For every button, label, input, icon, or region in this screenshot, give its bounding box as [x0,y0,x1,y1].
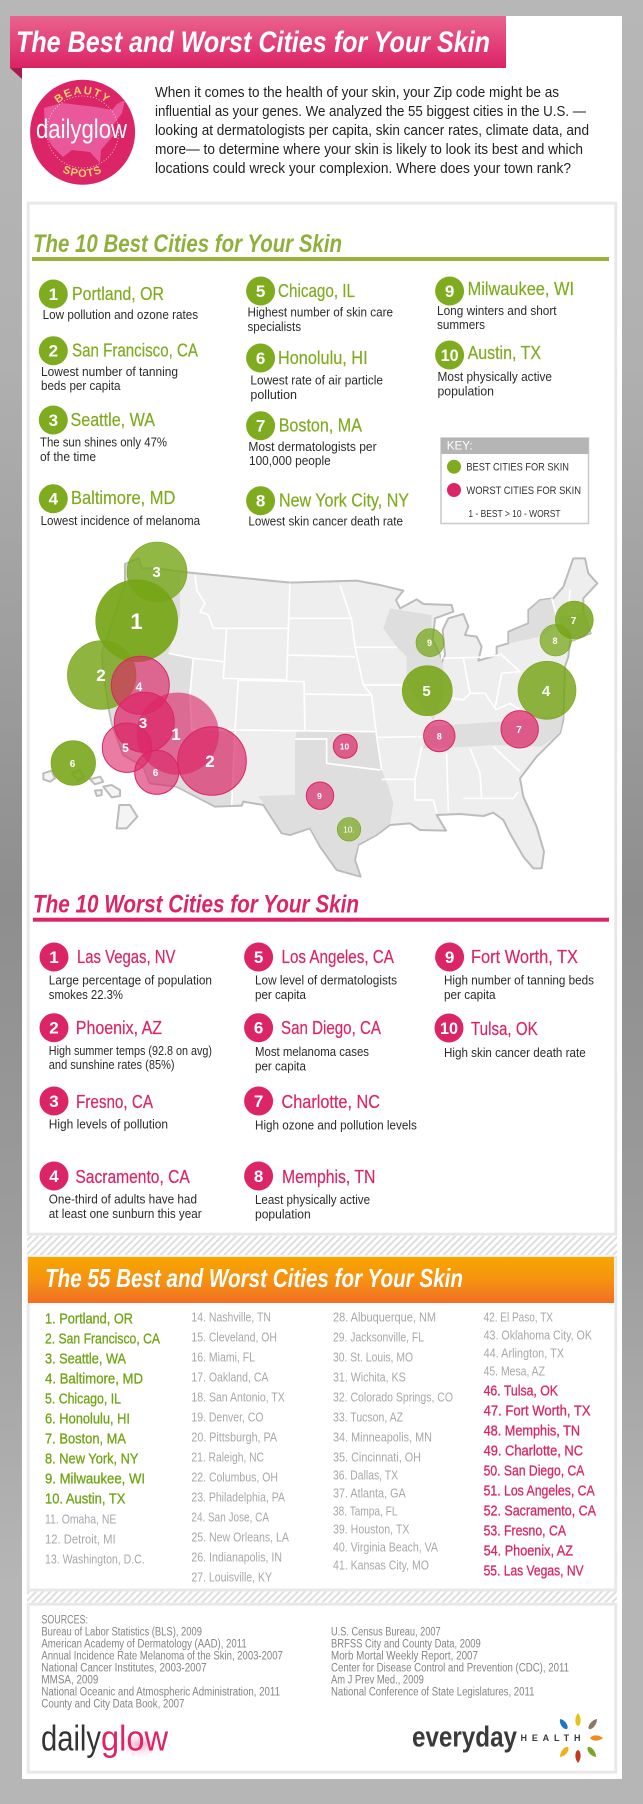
list column 4: 52. Sacramento, CA [484,1503,596,1519]
sources left column: SOURCES: [41,1614,88,1626]
title: The Best and Worst Cities for Your Skin [16,26,490,59]
map rank numbers: 3 [139,715,147,732]
map rank numbers: 6 [153,768,159,779]
logo: everyday health: HEALTH [520,1733,580,1743]
sources right column: BRFSS City and County Data, 2009 [331,1638,481,1650]
panel: best and worst cities [28,203,616,1234]
worst city 9 [435,942,594,1002]
worst city 5: per capita [255,988,306,1002]
best city 10: 10 [441,346,459,365]
best city 7: Boston, MA [279,416,362,436]
best city 9 [435,276,574,332]
list column 2: 27. Louisville, KY [191,1571,273,1585]
worst city 10: High skin cancer death rate [444,1046,586,1060]
map rank numbers: 7 [516,725,522,736]
worst city 1: smokes 22.3% [49,988,123,1002]
logo: everyday health [412,1713,603,1763]
worst city 6: San Diego, CA [281,1018,381,1038]
heading: 10 best cities [32,230,609,261]
sources left column: National Cancer Institutes, 2003-2007 [41,1662,207,1674]
icon: everyday health burst [560,1713,603,1763]
heading: 10 best cities: The 10 Best Cities for Your Skin [33,230,342,258]
best city 10: Most physically active [438,370,552,384]
worst city 1: Las Vegas, NV [77,947,175,967]
worst city 4: One-third of adults have had [49,1193,197,1207]
best city 4: 4 [49,490,59,509]
best city 3: of the time [40,450,96,464]
best city 5: 5 [256,282,265,301]
worst city 6: Most melanoma cases [255,1045,369,1059]
list column 2: 24. San Jose, CA [191,1511,270,1525]
list column 1: 12. Detroit, MI [45,1532,116,1546]
list column 1: 3. Seattle, WA [45,1351,126,1367]
worst city 8 [244,1162,375,1222]
list column 4: 48. Memphis, TN [484,1423,580,1439]
worst city 7: Charlotte, NC [282,1092,380,1112]
best city 9: 9 [445,282,454,301]
list column 4: 55. Las Vegas, NV [484,1563,584,1579]
worst city 9: 9 [445,948,454,967]
list column 4: 42. El Paso, TX [484,1311,554,1325]
icon: beauty spots badge [30,80,136,185]
list column 4: 53. Fresno, CA [484,1523,566,1539]
map rank numbers: 2 [205,752,215,771]
best city 2: beds per capita [41,379,121,393]
worst city 4 [40,1162,202,1221]
best city 6: Lowest rate of air particle [250,374,383,388]
best city 9: Long winters and short [437,304,557,318]
heading: 10 worst cities [33,891,609,922]
list column 1 [45,1311,160,1566]
map rank numbers: 9 [317,791,322,801]
worst city 9: per capita [444,988,496,1002]
best city 1: Low pollution and ozone rates [43,308,198,322]
logo: dailyglow: glow [101,1718,169,1759]
list column 3: 32. Colorado Springs, CO [333,1391,453,1405]
sources right column: Center for Disease Control and Prevention (CDC), 2011 [331,1662,569,1674]
best city 2: San Francisco, CA [72,341,198,361]
worst city 1: 1 [49,948,59,967]
list column 1: 4. Baltimore, MD [45,1371,143,1387]
best city 8: Lowest skin cancer death rate [248,515,403,529]
sources right column [331,1626,569,1698]
worst city 6 [244,1013,381,1074]
list column 2: 20. Pittsburgh, PA [191,1431,278,1445]
best city 2 [39,336,198,393]
sources left column: Bureau of Labor Statistics (BLS), 2009 [41,1626,202,1638]
worst city 7: High ozone and pollution levels [255,1118,417,1132]
best city 4: Lowest incidence of melanoma [41,514,200,528]
list column 2: 23. Philadelphia, PA [191,1491,286,1505]
icon: beauty spots badge: SPOTS [63,166,101,178]
list column 3: 33. Tucson, AZ [333,1411,403,1425]
worst city 4: 4 [49,1167,59,1186]
best city 4 [39,484,200,528]
best city 5: specialists [248,320,301,334]
list column 2: 16. Miami, FL [191,1351,255,1365]
sources left column: MMSA, 2009 [41,1674,98,1686]
best city 7 [246,411,377,468]
list column 1: 10. Austin, TX [45,1491,126,1507]
list column 4: 50. San Diego, CA [484,1463,585,1479]
list column 2 [191,1311,290,1585]
sources left column: National Oceanic and Atmospheric Administration, 2011 [41,1686,280,1698]
worst city 8: population [255,1208,311,1222]
pink city circles [102,656,538,809]
best city 5: Highest number of skin care [248,306,393,320]
worst city 3 [40,1086,168,1132]
worst city 9: Fort Worth, TX [471,947,578,967]
map rank numbers: 1 [171,725,181,744]
list column 3: 37. Atlanta, GA [333,1487,406,1501]
best city 6 [246,344,383,402]
worst city 2: Phoenix, AZ [76,1018,162,1038]
hawaii islands [43,770,137,828]
best city 3: 3 [49,411,58,430]
list column 3: 34. Minneapolis, MN [333,1431,432,1445]
best city 8: 8 [256,492,265,511]
list column 4: 51. Los Angeles, CA [484,1483,595,1499]
best city 2: 2 [49,342,58,361]
list column 1: 9. Milwaukee, WI [45,1471,145,1487]
list column 2: 22. Columbus, OH [191,1471,278,1485]
best city 9: summers [437,318,485,332]
list column 3: 29. Jacksonville, FL [333,1331,424,1345]
icon: beauty spots badge: dailyglow [36,114,127,144]
map rank numbers: 6 [70,759,76,770]
list column 3: 40. Virginia Beach, VA [333,1541,439,1555]
worst city 2: and sunshine rates (85%) [49,1058,175,1072]
icon: beauty spots badge: BEAUTY [54,86,110,104]
logo: dailyglow [41,1718,169,1760]
worst city 3: High levels of pollution [49,1118,168,1132]
list column 1: 11. Omaha, NE [45,1512,116,1526]
key legend: BEST CITIES FOR SKIN [466,462,569,474]
list column 4 [484,1311,596,1579]
best city 3: Seattle, WA [70,410,155,430]
intro paragraph: locations could wreck your complexion. Where does your town rank? [155,161,571,177]
worst city 10 [434,1014,586,1060]
panel: sources and logos [28,1604,616,1772]
worst city 3: 3 [49,1092,59,1111]
best city 5 [246,276,393,334]
worst city 8: Memphis, TN [282,1167,375,1187]
map rank numbers: 9 [427,638,432,648]
map rank numbers: 2 [96,666,106,685]
list column 4: 45. Mesa, AZ [484,1365,545,1379]
worst city 7: 7 [254,1092,263,1111]
worst city 6: per capita [255,1060,306,1074]
worst city 5: Los Angeles, CA [282,947,394,967]
best city 6: 6 [256,349,265,368]
list column 4: 47. Fort Worth, TX [484,1403,591,1419]
list column 2: 21. Raleigh, NC [191,1451,264,1465]
list column 4: 44. Arlington, TX [484,1347,565,1361]
worst city 4: Sacramento, CA [75,1167,190,1187]
worst city 10: 10 [440,1019,458,1038]
key legend [441,438,588,524]
best city 5: Chicago, IL [278,281,355,301]
sources right column: Am J Prev Med., 2009 [331,1674,424,1686]
sources left column: County and City Data Book, 2007 [41,1698,184,1710]
list column 1: 5. Chicago, IL [45,1391,121,1407]
list column 3: 31. Wichita, KS [333,1371,406,1385]
list column 2: 25. New Orleans, LA [191,1531,290,1545]
best city 9: Milwaukee, WI [468,279,574,299]
worst city 8: 8 [254,1167,263,1186]
intro paragraph: more— to determine where your skin is likely to look its best and which [155,142,583,158]
sources left column [41,1614,283,1710]
worst city 5: Low level of dermatologists [255,974,397,988]
intro paragraph: When it comes to the health of your skin, your Zip code might be as [155,85,559,101]
map rank numbers: 3 [152,564,161,581]
worst city 2 [40,1013,212,1072]
worst city 1 [40,942,212,1002]
list column 2: 26. Indianapolis, IN [191,1551,282,1565]
heading: 10 worst cities: The 10 Worst Cities for Your Skin [33,891,359,919]
best city 6: Honolulu, HI [278,348,368,368]
list column 1: 7. Boston, MA [45,1431,126,1447]
best city 2: Lowest number of tanning [41,365,178,379]
list column 3: 28. Albuquerque, NM [333,1311,436,1325]
map rank numbers: 7 [571,616,577,627]
list column 1: 13. Washington, D.C. [45,1552,145,1566]
list column 4: 43. Oklahoma City, OK [484,1329,593,1343]
best city 10: population [438,385,494,399]
map rank numbers: 4 [136,680,143,694]
green city circles [51,542,593,841]
map rank numbers [70,564,577,834]
list column 3: 36. Dallas, TX [333,1469,399,1483]
sources right column: U.S. Census Bureau, 2007 [331,1626,441,1638]
worst city 2: 2 [49,1019,59,1038]
logo: everyday health: everyday [412,1722,517,1754]
map rank numbers: 10 [340,742,349,752]
list column 2: 18. San Antonio, TX [191,1391,285,1405]
intro paragraph [155,85,589,177]
worst city 6: 6 [254,1019,263,1038]
map rank numbers: 4 [542,683,551,700]
map rank numbers: 5 [422,683,431,700]
best city 3: The sun shines only 47% [40,436,167,450]
best city 8 [246,486,409,529]
list column 1: 2. San Francisco, CA [45,1331,160,1347]
best city 10: Austin, TX [468,343,541,363]
best city 10 [435,340,552,399]
list column 3: 39. Houston, TX [333,1523,410,1537]
sources right column: Morb Mortal Weekly Report, 2007 [331,1650,478,1662]
sources left column: Annual Incidence Rate Melanoma of the Skin, 2003-2007 [41,1650,283,1662]
best city 7: 100,000 people [249,454,331,468]
title banner [10,16,506,79]
list column 3: 35. Cincinnati, OH [333,1451,421,1465]
sources right column: National Conference of State Legislatures, 2011 [331,1686,534,1698]
worst city 7 [244,1086,417,1132]
key legend: WORST CITIES FOR SKIN [466,485,581,497]
map rank numbers: 5 [122,741,129,755]
list column 1: 8. New York, NY [45,1451,139,1467]
list column 3: 30. St. Louis, MO [333,1351,413,1365]
list column 4: 49. Charlotte, NC [484,1443,583,1459]
worst city 5 [244,942,397,1002]
worst city 1: Large percentage of population [49,974,212,988]
best city 8: New York City, NY [279,491,409,511]
map rank numbers: 1 [130,609,143,634]
logo: dailyglow: daily [41,1718,101,1759]
worst city 3: Fresno, CA [76,1092,153,1112]
list column 4: 54. Phoenix, AZ [484,1543,573,1559]
map rank numbers: 10. [343,824,355,834]
best city 7: 7 [256,417,265,436]
list column 1: 6. Honolulu, HI [45,1411,130,1427]
map rank numbers: 8 [437,732,442,742]
intro paragraph: looking at dermatologists per capita, skin cancer rates, climate data, and [155,123,589,139]
worst city 10: Tulsa, OK [471,1019,538,1039]
list column 2: 17. Oakland, CA [191,1371,269,1385]
panel: 55 cities ranking [28,1257,616,1590]
orange heading banner: The 55 Best and Worst Cities for Your Skin [45,1263,463,1293]
map base [43,558,597,877]
list column 4: 46. Tulsa, OK [484,1383,558,1399]
best city 3 [39,406,167,464]
best city 7: Most dermatologists per [248,440,377,454]
map rank numbers: 8 [552,636,558,646]
list column 3 [333,1311,453,1573]
worst city 2: High summer temps (92.8 on avg) [49,1044,212,1058]
map: United States with ranked cities [43,542,597,877]
worst city 8: Least physically active [255,1193,370,1207]
worst city 9: High number of tanning beds [444,974,594,988]
worst city 4: at least one sunburn this year [49,1207,202,1221]
worst city 5: 5 [254,948,263,967]
orange heading banner [28,1257,614,1303]
list column 3: 38. Tampa, FL [333,1505,398,1519]
list column 3: 41. Kansas City, MO [333,1559,429,1573]
best city 6: pollution [250,388,297,402]
list column 1: 1. Portland, OR [45,1311,133,1327]
best city 1: Portland, OR [72,284,164,304]
best city 1 [39,280,198,322]
best city 4: Baltimore, MD [71,488,175,508]
best city 1: 1 [49,285,58,304]
list column 2: 15. Cleveland, OH [191,1331,277,1345]
intro paragraph: influential as your genes. We analyzed the 55 biggest cities in the U.S. — [155,104,586,120]
sources left column: American Academy of Dermatology (AAD), 2011 [41,1638,247,1650]
list column 2: 14. Nashville, TN [191,1311,271,1325]
key legend: 1 - BEST > 10 - WORST [468,508,561,520]
key legend: KEY: [447,438,473,452]
list column 2: 19. Denver, CO [191,1411,264,1425]
